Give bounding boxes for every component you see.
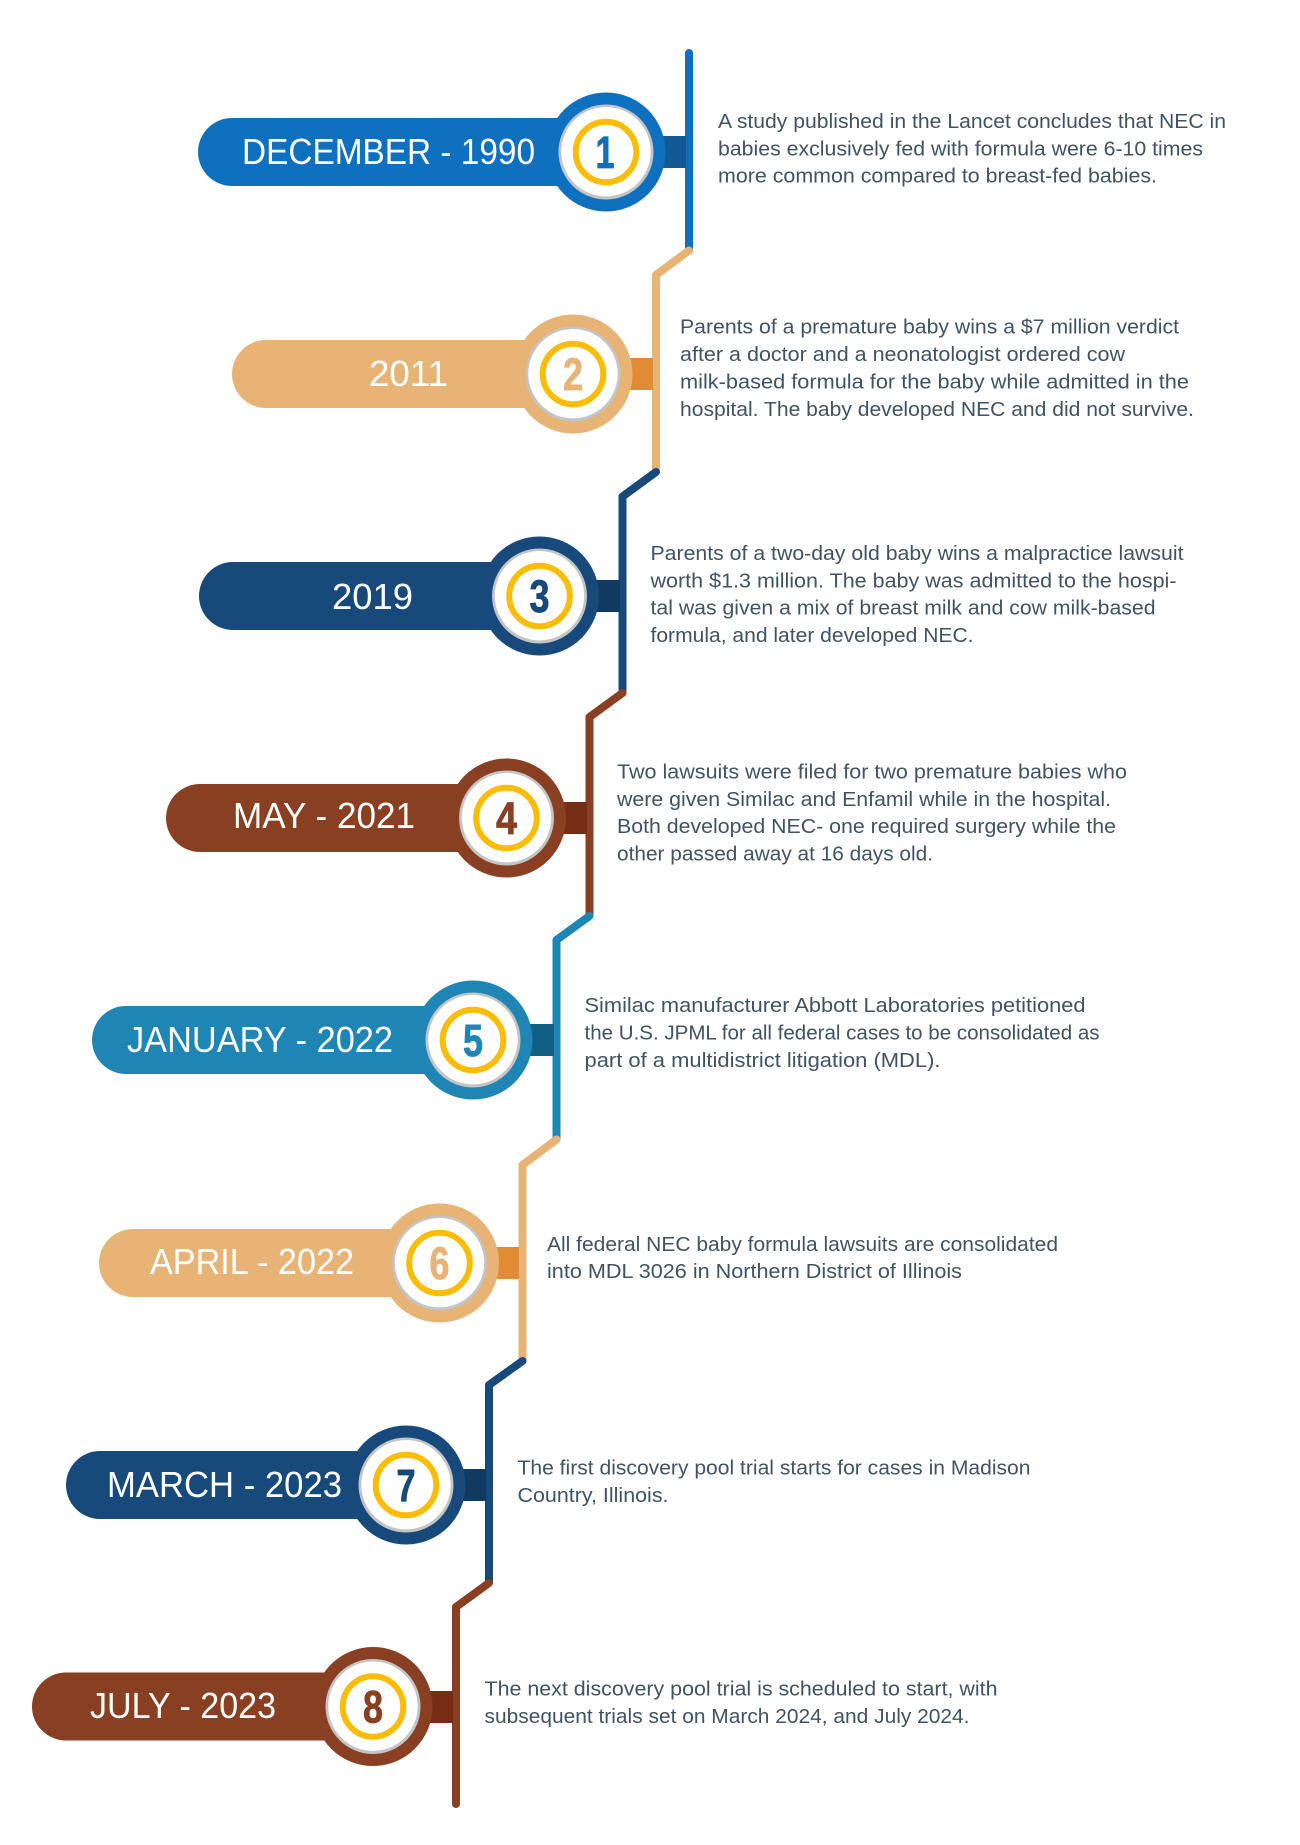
description 1: babies exclusively fed with formula were 6-10 times (718, 138, 1203, 160)
connector 3 (594, 580, 620, 612)
description 4 (616, 760, 1127, 866)
milestone 2: 2011 (232, 250, 1194, 471)
timeline line segment 3 (622, 472, 656, 692)
date label 8: JULY - 2023 (90, 1685, 276, 1726)
milestone 1: December 1990 (198, 53, 1226, 250)
description 3 (649, 542, 1184, 647)
date pill 5 (92, 1006, 473, 1074)
badge 5 (414, 980, 532, 1100)
badge 3: 3 (530, 571, 550, 622)
connector 1 (660, 136, 686, 168)
milestone 7: March 2023 (66, 1361, 1030, 1582)
description 8: The next discovery pool trial is scheduled to start, with (484, 1678, 998, 1701)
date label 7: MARCH - 2023 (107, 1464, 342, 1505)
description 6: into MDL 3026 in Northern District of Illinois (547, 1260, 962, 1283)
timeline line segment 5 (556, 916, 590, 1139)
timeline line segment 2 (656, 250, 689, 471)
date pill 1 (198, 118, 606, 186)
description 4: Two lawsuits were filed for two premature babies who (617, 760, 1127, 784)
date pill 2 (232, 340, 573, 408)
description 1: A study published in the Lancet concludes that NEC in (718, 110, 1226, 133)
timeline line segment 1 (685, 53, 693, 250)
description 2: Parents of a premature baby wins a $7 million verdict (680, 316, 1179, 338)
description 5: Similac manufacturer Abbott Laboratories petitioned (584, 994, 1086, 1017)
date pill 8 (32, 1672, 373, 1740)
description 7 (518, 1456, 1030, 1507)
connector 4 (561, 802, 587, 834)
connector 8 (428, 1691, 453, 1723)
description 3: tal was given a mix of breast milk and cow milk-based (650, 597, 1156, 620)
milestone 6: April 2022 (99, 1140, 1058, 1360)
description 3: worth $1.3 million. The baby was admitted to the hospi- (649, 569, 1176, 592)
date pill 4 (166, 784, 507, 852)
badge 4 (447, 758, 566, 878)
timeline line segment 6 (522, 1140, 556, 1360)
description 2: hospital. The baby developed NEC and did not survive. (680, 398, 1194, 421)
date label 6: APRIL - 2022 (150, 1241, 354, 1282)
badge 3 (480, 536, 599, 656)
description 2 (680, 316, 1194, 421)
date label 3: 2019 (332, 576, 413, 617)
date label 4: MAY - 2021 (233, 795, 415, 836)
badge 6 (380, 1204, 499, 1322)
description 3: Parents of a two-day old baby wins a malpractice lawsuit (650, 542, 1184, 565)
description 7: Country, Illinois. (518, 1484, 668, 1507)
badge 1: 1 (596, 127, 614, 178)
badge 8: 8 (363, 1682, 383, 1732)
milestone 3: 2019 (199, 472, 1184, 692)
description 5: part of a multidistrict litigation (MDL). (584, 1049, 940, 1072)
badge 7: 7 (396, 1460, 416, 1511)
badge 5: 5 (463, 1015, 483, 1066)
description 2: milk-based formula for the baby while admitted in the (680, 370, 1189, 394)
description 4: were given Similac and Enfamil while in the hospital. (616, 788, 1111, 811)
description 4: Both developed NEC- one required surgery while the (617, 815, 1116, 838)
date label 5: JANUARY - 2022 (127, 1019, 393, 1060)
connector 7 (461, 1469, 486, 1501)
timeline line segment 4 (590, 693, 622, 915)
badge 8 (314, 1647, 432, 1766)
timeline line segment 7 (489, 1361, 522, 1582)
badge 2 (514, 314, 632, 434)
description 5 (584, 994, 1100, 1072)
connector 5 (528, 1024, 554, 1056)
description 8: subsequent trials set on March 2024, and July 2024. (484, 1705, 970, 1728)
badge 4: 4 (496, 793, 517, 844)
description 5: the U.S. JPML for all federal cases to be consolidated as (584, 1022, 1100, 1044)
timeline line segment 8 (456, 1583, 489, 1804)
description 8 (484, 1678, 998, 1728)
milestone 4: May 2021 (166, 693, 1127, 915)
date pill 3 (199, 562, 540, 630)
date pill 6 (99, 1229, 440, 1297)
badge 2: 2 (563, 349, 583, 400)
description 1 (718, 110, 1226, 188)
description 1: more common compared to breast-fed babies. (718, 165, 1157, 188)
connector 2 (627, 358, 653, 390)
milestone 5: January 2022 (92, 916, 1100, 1139)
date label 1: DECEMBER - 1990 (242, 131, 535, 172)
badge 1 (546, 92, 666, 212)
date label 2: 2011 (369, 353, 448, 394)
description 7: The first discovery pool trial starts for cases in Madison (518, 1456, 1030, 1480)
badge 7 (346, 1426, 466, 1544)
description 4: other passed away at 16 days old. (617, 842, 933, 866)
description 6 (547, 1233, 1058, 1283)
date pill 7 (66, 1451, 406, 1519)
connector 6 (494, 1247, 519, 1279)
description 3: formula, and later developed NEC. (650, 624, 974, 647)
badge 6: 6 (430, 1238, 450, 1289)
description 2: after a doctor and a neonatologist ordered cow (680, 343, 1125, 366)
description 6: All federal NEC baby formula lawsuits are consolidated (547, 1233, 1058, 1256)
milestone 8: July 2023 (32, 1583, 998, 1804)
